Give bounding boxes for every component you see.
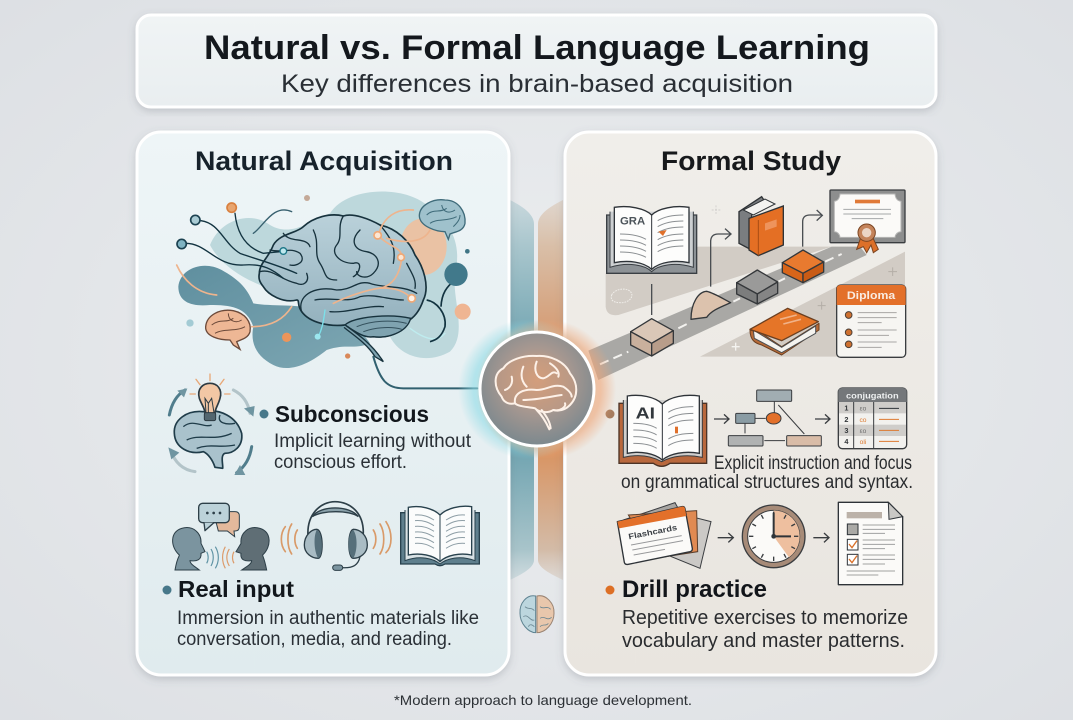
centre connector strips [510, 200, 563, 580]
table: conjugation: εο [860, 428, 867, 435]
icon: grammar book: GRA [620, 216, 645, 228]
icon: orange cube [782, 250, 824, 283]
table: conjugation: oli [860, 439, 867, 446]
text: real input description: conversation, media, and reading. [177, 629, 452, 650]
arrow [815, 414, 830, 424]
centre brain badge [458, 319, 616, 459]
text: drill practice description: vocabulary and master patterns. [622, 630, 905, 652]
illustration: brain network [177, 191, 477, 388]
icon: open book AI [619, 395, 707, 466]
table: conjugation: 1 [844, 404, 848, 413]
table: conjugation: co [859, 417, 867, 424]
bullet: drill practice [606, 586, 614, 594]
footnote: *Modern approach to language development. [394, 692, 692, 708]
icon: small split brain [520, 596, 554, 633]
subtitle: Key differences in brain-based acquisition [281, 70, 793, 98]
bullet: real input [162, 586, 172, 594]
table: conjugation: conjugation [846, 390, 899, 400]
icon: flashcards [617, 503, 711, 568]
title: Natural vs. Formal Language Learning [204, 29, 870, 67]
icon: speech bubbles [199, 503, 239, 537]
icon: grammar book [607, 207, 697, 273]
icon: curved tan shape [691, 291, 731, 319]
text: formal instruction description: on grammatical structures and syntax. [621, 472, 913, 493]
icon: open book [401, 506, 479, 566]
icon: small teal brain [419, 200, 465, 239]
bullet: subconscious [260, 410, 268, 418]
icon: worksheet [838, 502, 903, 585]
table: conjugation: 2 [844, 415, 848, 424]
diagram: grammar flow [728, 390, 821, 446]
table: conjugation [838, 388, 907, 449]
panel: formal study [565, 132, 936, 675]
bullet: grammar [606, 410, 614, 418]
icon: clock [742, 505, 805, 568]
illustration: learning road [588, 190, 906, 380]
icon: subconscious brain with bulb [168, 374, 255, 475]
heading: formal study: Formal Study [661, 146, 841, 176]
heading: real input: Real input [178, 576, 294, 602]
icons: grammar book, diagram, conjugation table [617, 388, 907, 585]
arrow [718, 533, 733, 542]
icon: flashcards: Flashcards [628, 523, 678, 541]
card: diploma checklist [837, 285, 906, 357]
icon: grey cube [737, 270, 778, 304]
text: subconscious description: conscious effort. [274, 452, 407, 473]
text: formal instruction description: Explicit instruction and focus [714, 453, 912, 474]
icon: orange book [750, 308, 819, 355]
icons: conversation, headset, book [173, 502, 479, 570]
icon: small orange brain [206, 310, 250, 349]
text: real input description: Immersion in authentic materials like [177, 608, 479, 629]
arrow [813, 533, 829, 542]
icon: book stack [739, 197, 783, 256]
icon: two heads talking [173, 528, 269, 570]
table: conjugation: 4 [844, 437, 849, 446]
table: conjugation: εο [860, 406, 867, 413]
icon: tan cube [631, 319, 673, 356]
card: diploma checklist: Diploma [847, 290, 895, 302]
text: drill practice description: Repetitive exercises to memorize [622, 607, 908, 629]
panel: natural acquisition [137, 132, 509, 675]
table: conjugation: 3 [844, 426, 848, 435]
heading: subconscious: Subconscious [275, 401, 429, 427]
heading: drill practice: Drill practice [622, 576, 767, 603]
heading: natural acquisition: Natural Acquisition [195, 146, 453, 176]
icon: glowing brain [496, 356, 576, 429]
icon: open book AI: AI [636, 405, 655, 422]
text: subconscious description: Implicit learning without [274, 431, 472, 452]
title box [137, 15, 936, 107]
icon: headset [281, 502, 391, 570]
icon: certificate [830, 190, 905, 253]
arrow [714, 414, 729, 424]
